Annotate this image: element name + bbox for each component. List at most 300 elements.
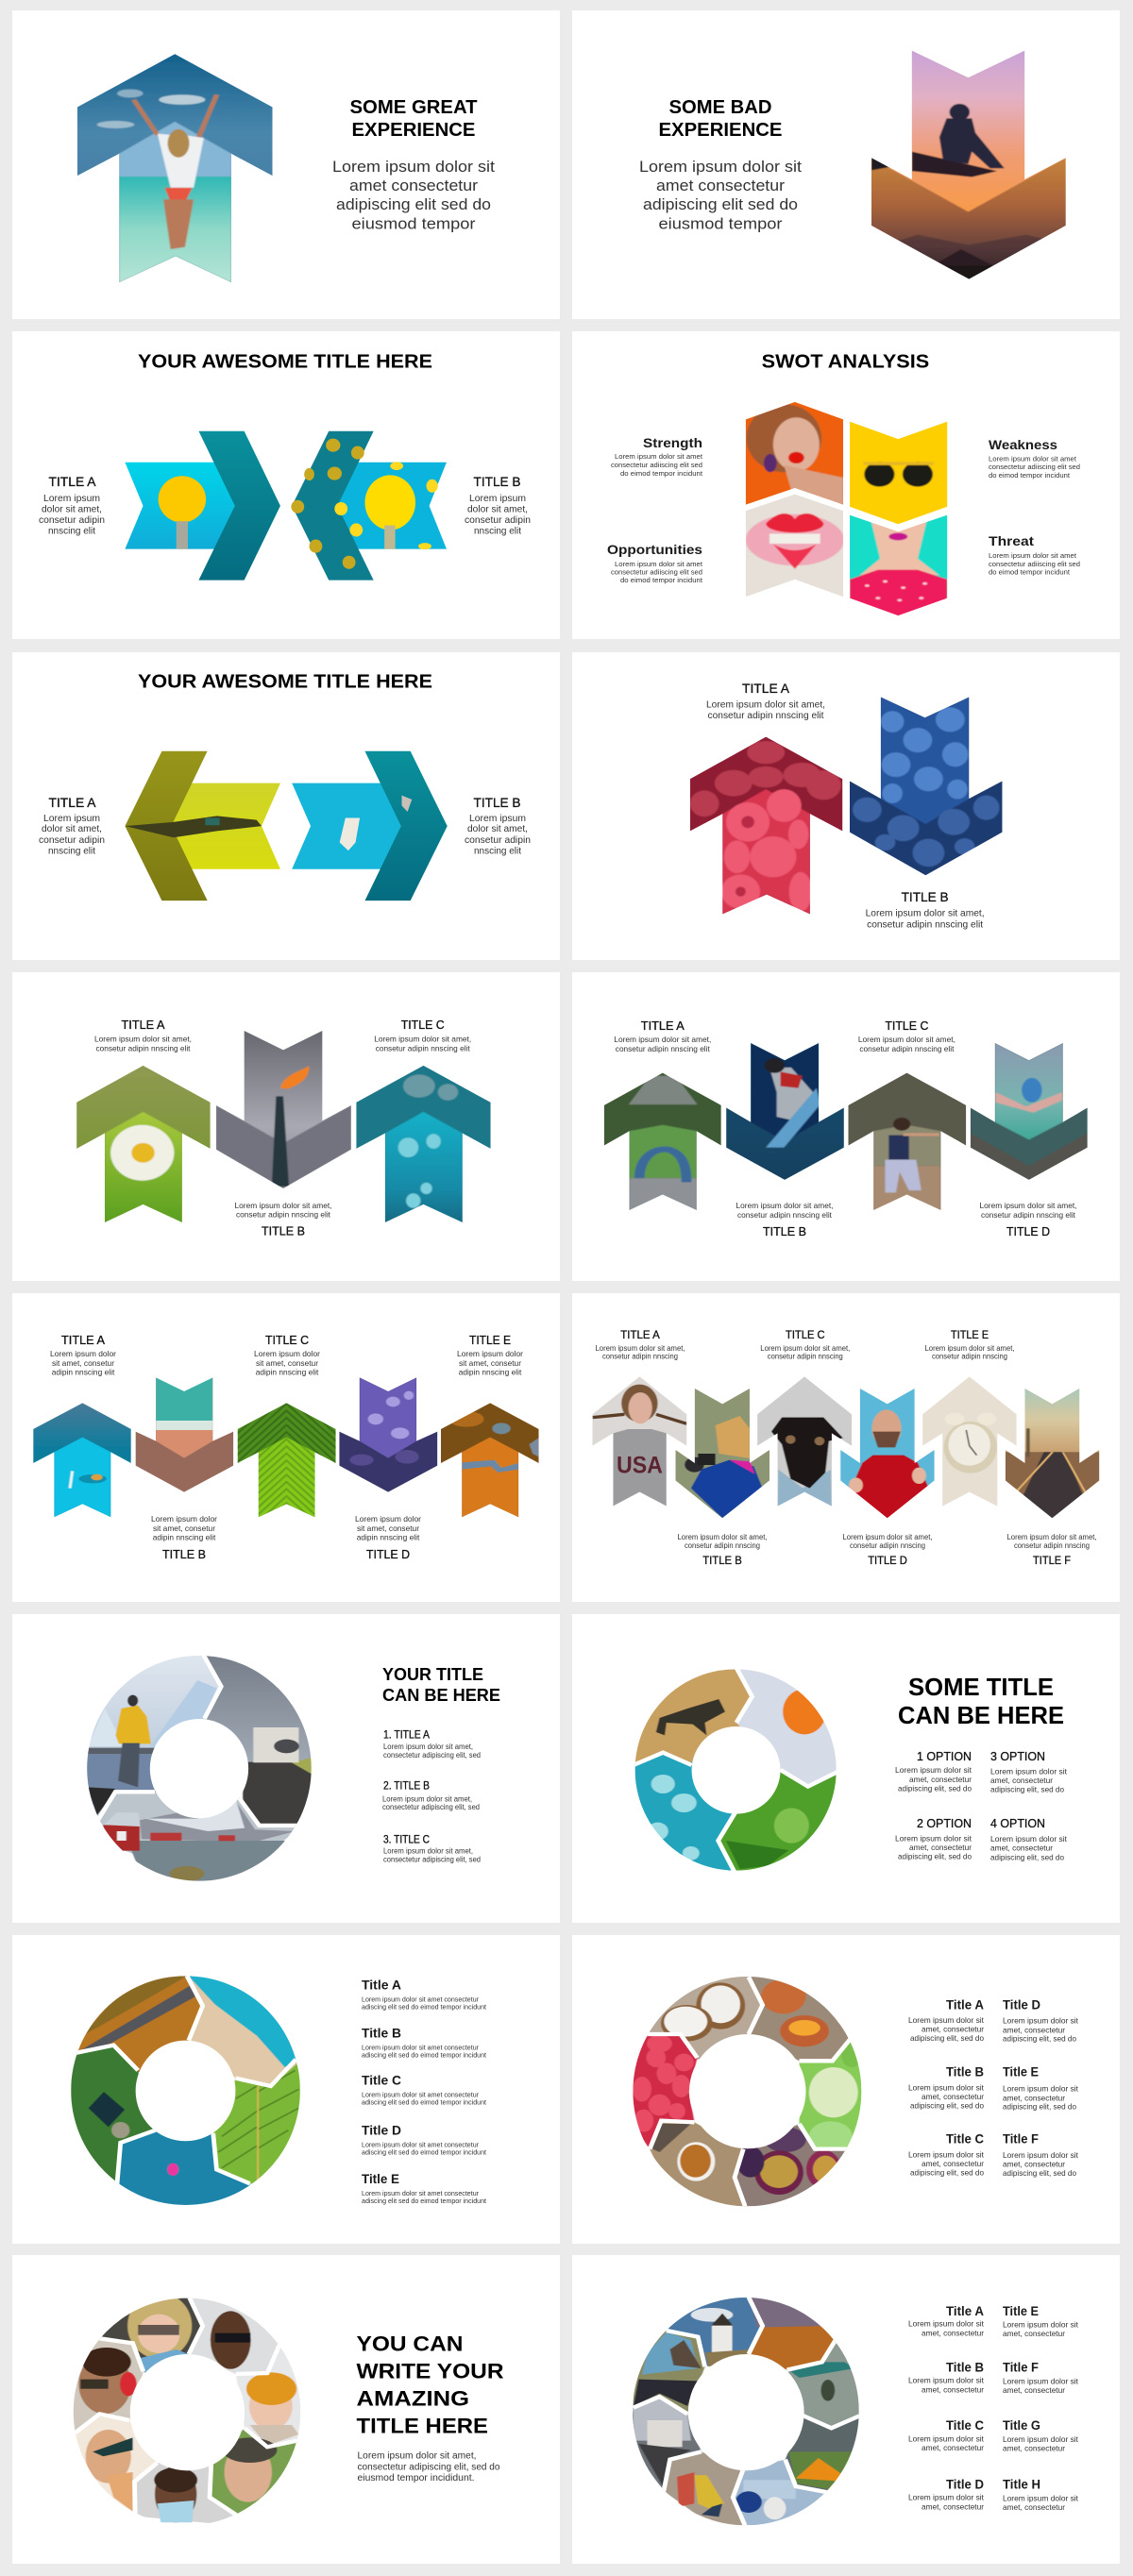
text block: title C: amet, consectetur — [922, 2159, 984, 2168]
text block: weakness: Lorem ipsum dolor sit amet — [989, 455, 1077, 463]
text block: threat: do eimod tempor incidunt — [989, 568, 1071, 576]
text block: title A: consetur adipin — [39, 514, 105, 526]
chart: eight segment travel donut — [628, 2296, 862, 2529]
list item: title B: consectetur adipiscing elit, sed — [382, 1803, 480, 1811]
text block: title E: adipiscing elit, sed do — [1003, 2102, 1076, 2112]
option: 3 option: 3 OPTION — [990, 1749, 1045, 1763]
text block: title C: Title C — [946, 2418, 984, 2433]
text block: title C: Title C — [946, 2131, 984, 2146]
text block: title B: TITLE B — [262, 1224, 305, 1237]
icon: right sea arrow — [292, 751, 448, 901]
icon: pug up arrow — [755, 1375, 854, 1507]
text block: title E: adiscing elit sed do eimod tempor incidunt — [362, 2197, 487, 2205]
option: 2 option: Lorem ipsum dolor sit — [895, 1833, 972, 1843]
text block: title F: amet, consectetur — [1003, 2160, 1065, 2169]
text block: title C: adipiscing elit, sed do — [910, 2167, 984, 2177]
text block: title A: dolor sit amet, — [42, 504, 102, 515]
text block: title B: adiscing elit sed do eimod tempor incidunt — [362, 2051, 487, 2060]
text block: weakness: consectetur adiiscing elit sed — [989, 463, 1080, 471]
text block: title C — [254, 1334, 320, 1376]
text block: title A: consetur adipin nnscing elit — [708, 711, 824, 721]
text block: title E — [457, 1334, 523, 1376]
text block: title F: Lorem ipsum dolor sit amet, — [1006, 1533, 1097, 1541]
text block: title C — [374, 1019, 471, 1052]
text block: title C — [362, 2074, 487, 2107]
text block: title F: consetur adipin nnscing — [1014, 1541, 1090, 1550]
text block: title F: adipiscing elit, sed do — [1003, 2168, 1076, 2178]
heading: you can write your amazing title here: AMAZING — [357, 2387, 469, 2411]
text block: bad experience body: adipiscing elit sed do — [643, 195, 798, 213]
text block: title C — [858, 1019, 955, 1053]
text block: title A — [362, 1978, 487, 2012]
text block: title A: dolor sit amet, — [42, 823, 102, 834]
text block: title E: Lorem ipsum dolor sit — [1003, 2084, 1079, 2094]
option: 3 option: Lorem ipsum dolor sit — [990, 1766, 1068, 1776]
text block: title B: adipin nnscing elit — [153, 1533, 216, 1542]
text block: title D: sit amet, consetur — [357, 1524, 419, 1533]
text block: title A: Lorem ipsum — [43, 813, 100, 824]
text block: title D: Lorem ipsum dolor sit amet consectetur — [362, 2141, 479, 2149]
list item: title C: 3. TITLE C — [383, 1832, 430, 1845]
text block: title A: Lorem ipsum dolor sit — [908, 2015, 985, 2025]
chart: four segment photo donut — [632, 1666, 841, 1876]
icon: right paddle arrow — [291, 431, 447, 581]
list item: title A: Lorem ipsum dolor sit amet, — [383, 1743, 473, 1751]
icon: girl USA shirt up arrow — [591, 1375, 688, 1507]
text block: great experience body — [332, 158, 495, 232]
text block: threat: Lorem ipsum dolor sit amet — [989, 551, 1077, 560]
text block: title A: sit amet, consetur — [52, 1358, 114, 1368]
text block: title B: nnscing elit — [474, 525, 521, 536]
text block: threat: consectetur adiiscing elit sed — [989, 560, 1080, 568]
text block: bad experience body: Lorem ipsum dolor sit — [639, 158, 802, 176]
text block: title A: amet, consectetur — [922, 2328, 984, 2337]
text block: title F — [1006, 1533, 1097, 1567]
heading: some title can be here: SOME TITLE — [908, 1673, 1054, 1701]
text block: title D: Lorem ipsum dolor sit amet, — [842, 1533, 933, 1541]
text block: title B: Lorem ipsum dolor sit amet, — [234, 1201, 332, 1210]
list item: title B — [382, 1779, 480, 1811]
text block: title D: consetur adipin nnscing — [850, 1541, 925, 1550]
text block: title A: TITLE A — [620, 1328, 660, 1341]
list item: title C — [383, 1832, 481, 1863]
text block: title A: adipiscing elit, sed do — [910, 2033, 984, 2043]
icon: alarm clock up arrow — [921, 1375, 1019, 1507]
text block: opportunities: Lorem ipsum dolor sit amet — [615, 560, 703, 568]
option: 4 option: 4 OPTION — [990, 1816, 1045, 1830]
text block: title F — [1003, 2360, 1079, 2395]
icon: autumn river up arrow — [439, 1402, 540, 1518]
icon: snowboard down arrow — [722, 1041, 847, 1182]
text block: title F: Lorem ipsum dolor sit — [1003, 2150, 1079, 2160]
option: 1 option: 1 OPTION — [917, 1749, 972, 1763]
icon: daisy up arrow — [73, 1064, 213, 1224]
panel: donut with six segments — [572, 1935, 1120, 2244]
text block: title E: Lorem ipsum dolor sit — [1003, 2319, 1079, 2329]
text block: title A — [94, 1019, 192, 1052]
text block: title H: Lorem ipsum dolor sit — [1003, 2493, 1079, 2502]
text block: title C — [908, 2418, 985, 2452]
heading: you can write your amazing title here: YOU CAN — [357, 2332, 463, 2356]
text block: title B: adipiscing elit, sed do — [910, 2100, 984, 2110]
text block: title C: amet, consectetur — [922, 2443, 984, 2452]
text block: title E: Lorem ipsum dolor — [457, 1349, 523, 1358]
heading: some bad experience — [659, 97, 782, 141]
text block: title H — [1003, 2477, 1079, 2512]
heading: some great experience: SOME GREAT — [349, 97, 478, 118]
chart: five segment photo donut — [68, 1975, 302, 2209]
panel: awesome title with two paddles — [12, 331, 560, 639]
text block: title A: TITLE A — [742, 682, 789, 696]
text block: title D: amet, consectetur — [922, 2501, 984, 2511]
text block: title B: consetur adipin nnscing — [685, 1541, 760, 1550]
icon: green field up arrow — [236, 1402, 337, 1518]
text block: title D: Lorem ipsum dolor sit amet, — [980, 1201, 1076, 1210]
text block: title A: Lorem ipsum — [43, 493, 100, 504]
text block: title F: TITLE F — [1033, 1554, 1071, 1567]
text block: title C: adipin nnscing elit — [256, 1367, 319, 1376]
text block: title C: TITLE C — [885, 1019, 928, 1033]
text block: title E: consetur adipin nnscing — [932, 1353, 1007, 1361]
text block: title B: TITLE B — [162, 1548, 206, 1561]
text block: title B — [234, 1201, 332, 1237]
text block: title C: Lorem ipsum dolor sit amet, — [374, 1035, 471, 1044]
option: 2 option — [895, 1816, 972, 1860]
text block: title B: nnscing elit — [474, 846, 521, 857]
option: 4 option: Lorem ipsum dolor sit — [990, 1834, 1068, 1844]
text block: title C: sit amet, consetur — [256, 1358, 318, 1368]
text block: title A: adiscing elit sed do eimod tempor incidunt — [362, 2003, 487, 2012]
text block: title D: Title D — [362, 2124, 401, 2138]
text block: title C: Lorem ipsum dolor sit amet, — [858, 1035, 955, 1044]
option: 4 option: adipiscing elit, sed do — [990, 1852, 1064, 1861]
text block: title A: Lorem ipsum dolor sit amet, — [706, 699, 825, 710]
text block: title A: TITLE A — [121, 1019, 165, 1032]
icon: raspberry up arrow — [686, 734, 845, 917]
text block: title B: Lorem ipsum dolor sit — [908, 2083, 985, 2093]
text block: strength: do eimod tempor incidunt — [620, 469, 703, 478]
text block: great experience body: amet consectetur — [349, 177, 478, 194]
text block: title B: dolor sit amet, — [467, 504, 528, 515]
text block: title G: Lorem ipsum dolor sit — [1003, 2434, 1079, 2444]
text block: title A — [908, 2304, 985, 2337]
text block: title G: amet, consectetur — [1003, 2444, 1065, 2453]
text block: title C: Lorem ipsum dolor sit — [908, 2149, 985, 2159]
text block: portrait donut body: Lorem ipsum dolor sit amet, — [357, 2451, 476, 2462]
text block: title D: TITLE D — [868, 1554, 907, 1567]
text block: title D — [980, 1201, 1076, 1238]
icon: water up arrow — [354, 1064, 495, 1224]
text block: title A: Lorem ipsum dolor sit amet, — [94, 1035, 192, 1044]
icon: left paddle arrow — [125, 431, 280, 581]
text block: title B: consetur adipin nnscing elit — [867, 919, 983, 930]
text block: title A: TITLE A — [61, 1334, 106, 1347]
text block: opportunities: Opportunities — [607, 543, 702, 557]
text block: title B — [678, 1533, 767, 1567]
icon: railway down arrow — [1004, 1387, 1102, 1520]
text block: title B — [465, 475, 531, 536]
text block: title A: Lorem ipsum dolor sit amet, — [614, 1035, 711, 1044]
text block: title A — [39, 796, 105, 857]
text block: title C: TITLE C — [401, 1019, 445, 1032]
text block: title D — [355, 1514, 421, 1561]
panel: some bad experience — [572, 10, 1120, 319]
panel: berries arrows — [572, 652, 1120, 960]
text block: title D: TITLE D — [366, 1548, 410, 1561]
icon: snorkel down arrow — [969, 1041, 1091, 1182]
heading: some bad experience: EXPERIENCE — [659, 120, 782, 141]
text block: title E: Title E — [362, 2172, 399, 2186]
text block: title D: Title D — [1003, 1998, 1040, 2012]
chart: six segment food donut — [632, 1975, 866, 2209]
text block: bad experience body: amet consectetur — [656, 177, 785, 194]
text block: title E — [362, 2172, 487, 2205]
text block: title B: sit amet, consetur — [153, 1524, 215, 1533]
text block: bad experience body: eiusmod tempor — [659, 215, 783, 232]
text block: title D: Lorem ipsum dolor — [355, 1514, 421, 1524]
text block: title A: TITLE A — [641, 1019, 685, 1033]
icon: flare down arrow — [213, 1029, 354, 1190]
text block: title B: amet, consectetur — [922, 2092, 984, 2101]
text block: opportunities: do eimod tempor incidunt — [620, 576, 703, 584]
text block: title B: consetur adipin nnscing elit — [737, 1210, 833, 1220]
text block: great experience body: Lorem ipsum dolor sit — [332, 158, 495, 176]
text block: title B — [362, 2027, 487, 2060]
text block: title A: consetur adipin nnscing elit — [96, 1043, 191, 1052]
option: 2 option: amet, consectetur — [909, 1843, 972, 1852]
text block: title E: Lorem ipsum dolor sit amet consectetur — [362, 2189, 479, 2197]
icon: down arrow sunset photo — [867, 48, 1070, 282]
text block: title C: Lorem ipsum dolor — [254, 1349, 320, 1358]
text block: title A: TITLE A — [49, 796, 96, 810]
option: 3 option — [990, 1749, 1068, 1794]
text block: title D — [908, 2477, 985, 2511]
icon: strength portrait hexagon — [744, 401, 845, 507]
heading: some great experience: EXPERIENCE — [351, 120, 476, 141]
icon: opportunities lips hexagon — [744, 492, 845, 598]
text block: title E — [925, 1328, 1014, 1361]
text block: title C — [760, 1328, 850, 1361]
text block: title B: TITLE B — [474, 796, 521, 810]
text block: title A — [595, 1328, 685, 1361]
text block: title B: Lorem ipsum — [469, 493, 526, 504]
text block: title B: amet, consectetur — [922, 2384, 984, 2394]
text block: title C: TITLE C — [265, 1334, 309, 1347]
option: 2 option: adipiscing elit, sed do — [898, 1851, 972, 1860]
text block: title B: consetur adipin — [465, 514, 531, 526]
list item: title A: 1. TITLE A — [383, 1728, 430, 1742]
panel: some great experience — [12, 10, 560, 319]
text block: title D: amet, consectetur — [1003, 2025, 1065, 2034]
text block: title A — [706, 682, 825, 721]
text block: great experience body: eiusmod tempor — [351, 215, 476, 232]
text block: title B: Title B — [362, 2027, 401, 2041]
panel: SWOT analysis — [572, 331, 1120, 639]
heading: some bad experience: SOME BAD — [668, 97, 772, 118]
icon: blueberry down arrow — [845, 695, 1008, 877]
text block: title A: adipin nnscing elit — [52, 1367, 115, 1376]
text block: title C: consetur adipin nnscing elit — [376, 1043, 470, 1052]
text block: title D: TITLE D — [1006, 1225, 1050, 1238]
text block: strength: Lorem ipsum dolor sit amet — [615, 452, 703, 461]
text block: title B — [465, 796, 531, 857]
heading: you can write your amazing title here: TITLE HERE — [357, 2415, 488, 2438]
text block: threat: Threat — [989, 534, 1035, 548]
text block: title E: Title E — [1003, 2065, 1039, 2079]
title: YOUR AWESOME TITLE HERE — [138, 351, 432, 372]
heading: you can write your amazing title here — [357, 2332, 504, 2438]
text block: title A — [614, 1019, 711, 1053]
chart: three segment photo donut — [82, 1654, 316, 1888]
text block: title E — [1003, 2065, 1079, 2112]
text block: title A: Lorem ipsum dolor sit — [908, 2319, 985, 2329]
text block: title B: TITLE B — [474, 475, 521, 489]
option: 3 option: amet, consectetur — [990, 1776, 1053, 1785]
text block: title B — [908, 2360, 985, 2394]
text block: portrait donut body: eiusmod tempor incididunt. — [357, 2473, 474, 2483]
text block: title B: TITLE B — [763, 1225, 806, 1238]
panel: donut with eight segments — [572, 2255, 1120, 2564]
text block: title F: Title F — [1003, 2360, 1039, 2374]
text block: title B: consetur adipin nnscing elit — [236, 1209, 331, 1219]
text block: title C: adiscing elit sed do eimod tempor incidunt — [362, 2098, 487, 2107]
text block: strength: consectetur adiiscing elit sed — [611, 461, 702, 469]
text block: title D — [1003, 1998, 1079, 2044]
text block: title A: Lorem ipsum dolor sit amet, — [595, 1344, 685, 1353]
text block: title A: consetur adipin nnscing — [602, 1353, 678, 1361]
icon: threat neck hexagon — [849, 513, 950, 619]
icon: happy man down arrow — [838, 1387, 937, 1520]
icon: purple forest down arrow — [337, 1376, 438, 1493]
text block: title A: Title A — [362, 1978, 401, 1993]
text block: title C: Lorem ipsum dolor sit amet, — [760, 1344, 850, 1353]
text block: title G: Title G — [1003, 2418, 1040, 2433]
text block: weakness: do eimod tempor incidunt — [989, 471, 1071, 480]
option: 1 option — [895, 1749, 972, 1793]
text block: title B — [736, 1201, 833, 1238]
option: 1 option: Lorem ipsum dolor sit — [895, 1765, 972, 1775]
option: 3 option: adipiscing elit, sed do — [990, 1785, 1064, 1794]
list item: title A — [383, 1728, 481, 1759]
icon: weakness sunglasses hexagon — [849, 419, 950, 526]
icon: left field arrow — [125, 751, 280, 901]
text block: title C: Lorem ipsum dolor sit — [908, 2433, 985, 2443]
option: 4 option — [990, 1816, 1068, 1861]
text block: title B: Lorem ipsum dolor sit amet, — [678, 1533, 767, 1541]
text block: title C — [908, 2131, 985, 2177]
text block: title A: nnscing elit — [48, 846, 95, 857]
text block: threat — [989, 534, 1080, 576]
list item: title B: 2. TITLE B — [383, 1779, 430, 1793]
text block: title B: Lorem ipsum dolor sit amet consectetur — [362, 2044, 479, 2052]
text block: title E: adipin nnscing elit — [459, 1367, 522, 1376]
text block: title E: amet, consectetur — [1003, 2329, 1065, 2338]
text block: strength: Strength — [643, 436, 702, 450]
text block: title C: consetur adipin nnscing elit — [859, 1044, 955, 1053]
text block: title B: Lorem ipsum dolor — [151, 1514, 217, 1524]
heading: you can write your amazing title here: WRITE YOUR — [357, 2360, 504, 2383]
heading: some title can be here: CAN BE HERE — [898, 1701, 1064, 1729]
text block: title F: Lorem ipsum dolor sit — [1003, 2376, 1079, 2385]
panel: donut with seven portraits — [12, 2255, 560, 2564]
text block: bad experience body — [639, 158, 802, 232]
text block: title D: consetur adipin nnscing elit — [981, 1210, 1076, 1220]
icon: photographer down arrow — [673, 1387, 771, 1519]
icon: yoga up arrow — [600, 1071, 726, 1213]
text block: title A: consetur adipin nnscing elit — [616, 1044, 710, 1053]
text block: title C: consetur adipin nnscing — [768, 1353, 843, 1361]
text block: opportunities — [607, 543, 703, 584]
text block: title B — [151, 1514, 217, 1561]
text block: title C: TITLE C — [786, 1328, 825, 1341]
text block: title D: Lorem ipsum dolor sit — [908, 2493, 985, 2502]
text block: title B: Lorem ipsum dolor sit amet, — [866, 909, 985, 919]
text block: title B: TITLE B — [902, 890, 949, 904]
text block: title B: consetur adipin — [465, 834, 531, 846]
heading: your title can be here: YOUR TITLE — [382, 1664, 483, 1684]
title: YOUR AWESOME TITLE HERE — [138, 672, 432, 693]
text block: title C: Lorem ipsum dolor sit amet consectetur — [362, 2091, 479, 2099]
option: 1 option: adipiscing elit, sed do — [898, 1784, 972, 1793]
text block: title D: adipiscing elit, sed do — [1003, 2034, 1076, 2044]
panel: awesome title with field and sea — [12, 652, 560, 960]
panel: donut with five segments — [12, 1935, 560, 2244]
text block: title H: amet, consectetur — [1003, 2502, 1065, 2512]
list item: title C: consectetur adipiscing elit, sed — [383, 1855, 481, 1863]
text block: title A — [908, 1998, 985, 2043]
text block: title H: Title H — [1003, 2477, 1040, 2491]
text block: title D: Lorem ipsum dolor sit — [1003, 2016, 1079, 2026]
heading: your title can be here — [382, 1664, 500, 1705]
icon: up arrow beach photo — [73, 52, 279, 284]
text block: title A: amet, consectetur — [922, 2025, 984, 2034]
list item: title C: Lorem ipsum dolor sit amet, — [383, 1847, 473, 1856]
chart: seven segment portrait donut — [72, 2293, 302, 2526]
icon: beach down arrow — [134, 1376, 236, 1493]
text block: title F: Title F — [1003, 2131, 1039, 2146]
text block: title B: dolor sit amet, — [467, 823, 528, 834]
text block: title D — [842, 1533, 933, 1567]
text block: title D — [362, 2124, 487, 2157]
text block: title E: TITLE E — [951, 1328, 989, 1341]
text block: title B: Lorem ipsum dolor sit amet, — [736, 1201, 833, 1210]
panel: six arrows — [572, 1293, 1120, 1602]
text block: title E: TITLE E — [469, 1334, 511, 1347]
icon: squat up arrow — [845, 1071, 970, 1213]
text block: opportunities: consectetur adiiscing elit sed — [611, 568, 702, 576]
text block: title G — [1003, 2418, 1079, 2453]
panel: four arrows — [572, 972, 1120, 1281]
text block: portrait donut body: consectetur adipiscing elit, sed do — [357, 2462, 500, 2472]
option: 2 option: 2 OPTION — [917, 1816, 972, 1830]
text block: title E: Title E — [1003, 2304, 1039, 2318]
text block: title E: sit amet, consetur — [459, 1358, 521, 1368]
text block: title A: Title A — [946, 2304, 984, 2318]
text block: title D: adipin nnscing elit — [357, 1533, 420, 1542]
text block: portrait donut body — [357, 2451, 500, 2483]
text block: great experience body: adipiscing elit sed do — [336, 195, 491, 213]
text block: title A — [39, 475, 105, 536]
heading: some great experience — [349, 97, 478, 141]
text block: title A: Lorem ipsum dolor sit amet consectetur — [362, 1995, 479, 2004]
text block: title B — [908, 2065, 985, 2110]
text block: title D: adiscing elit sed do eimod tempor incidunt — [362, 2148, 487, 2157]
list item: title B: Lorem ipsum dolor sit amet, — [382, 1795, 472, 1804]
text block: title D: Title D — [946, 2477, 984, 2491]
text block: strength — [611, 436, 703, 478]
text block: title B: Title B — [946, 2360, 984, 2374]
text block: title F — [1003, 2131, 1079, 2178]
